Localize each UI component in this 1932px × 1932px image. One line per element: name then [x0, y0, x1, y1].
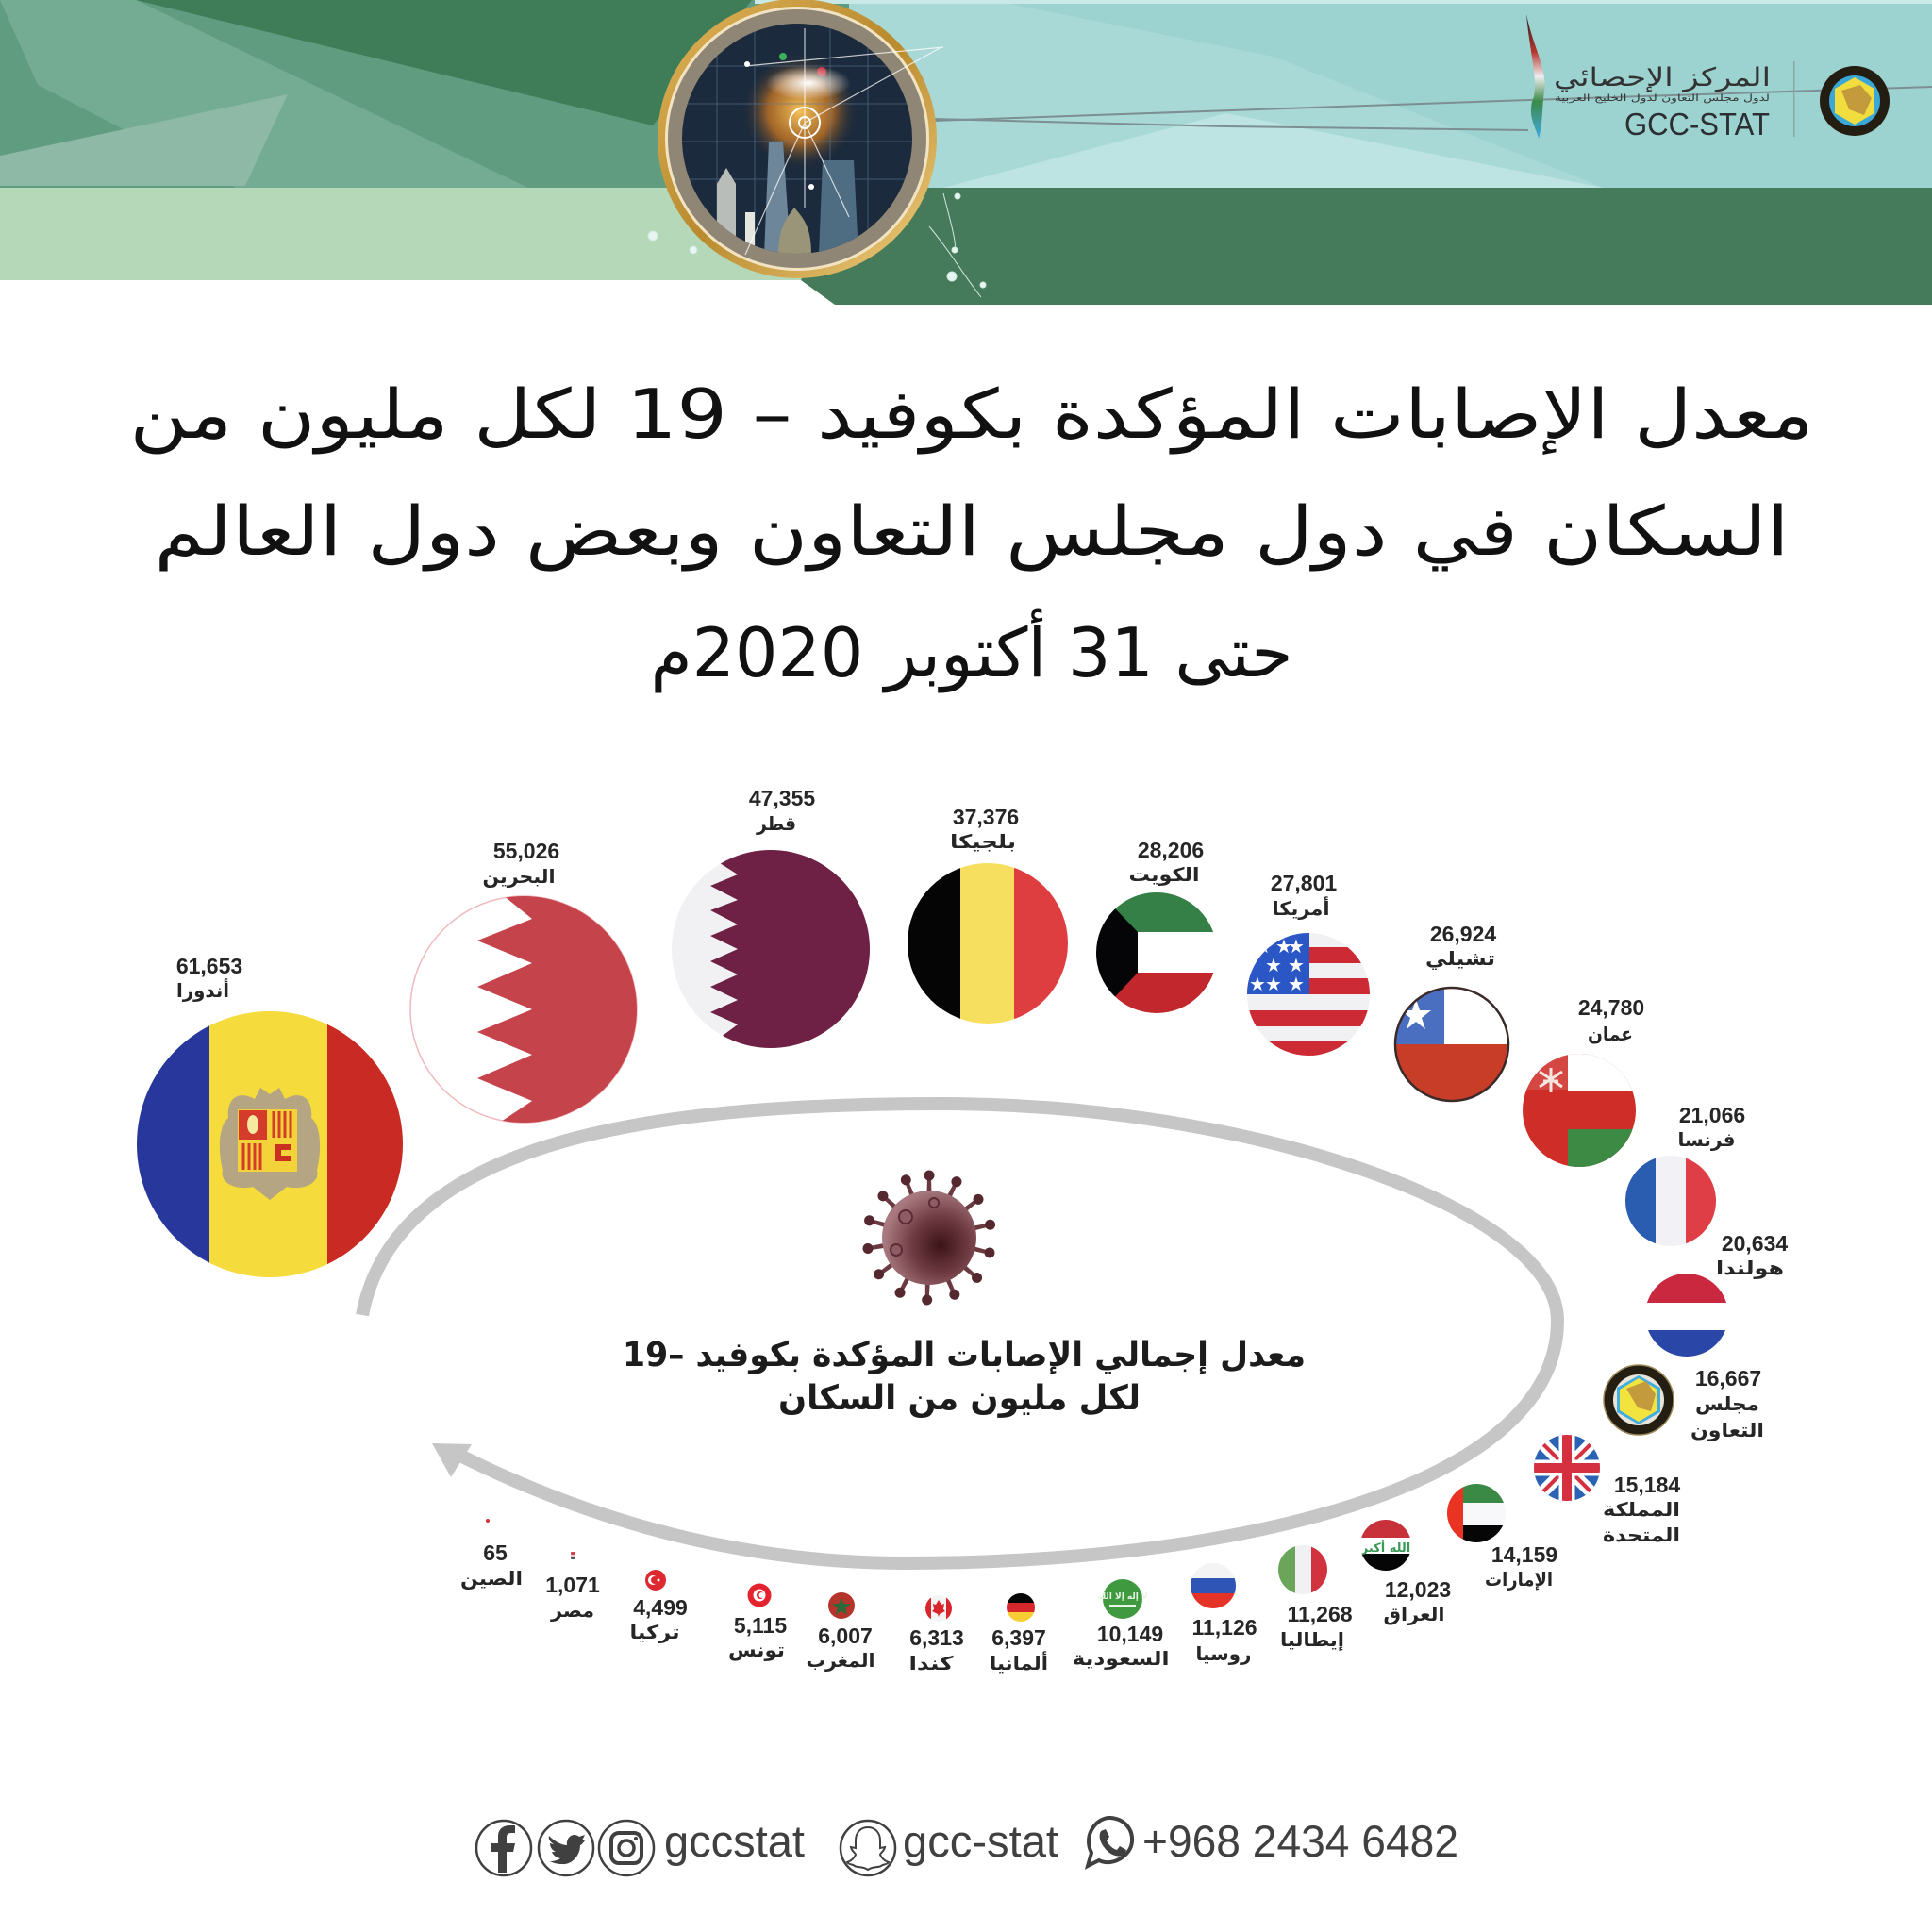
label: USA: أمريكا [1272, 895, 1330, 920]
flag: Kuwait [1096, 892, 1213, 1013]
title: السكان في دول مجلس التعاون وبعض دول العالم [155, 491, 1790, 572]
label: Chile: 26,924 [1430, 922, 1496, 946]
center caption [623, 1336, 1306, 1418]
label: Morocco: 6,007 [818, 1624, 873, 1648]
flag: USA: ★ [1255, 935, 1272, 958]
label: Oman: 24,780 [1578, 995, 1644, 1020]
phone number: +968 2434 6482 [1142, 1816, 1458, 1866]
label: Qatar [749, 786, 815, 835]
handle: gccstat: gccstat [664, 1816, 805, 1866]
label: Iraq [1383, 1577, 1451, 1625]
label: Turkey [630, 1595, 688, 1643]
label: USA: 27,801 [1271, 871, 1337, 895]
label: Iraq: 12,023 [1385, 1577, 1451, 1602]
flag: Russia [1191, 1563, 1236, 1608]
label: Qatar: قطر [756, 812, 796, 835]
flag: USA [1245, 932, 1373, 1057]
label: France: 21,066 [1679, 1103, 1745, 1127]
logo subtitle: لدول مجلس التعاون لدول الخليج العربية [1555, 93, 1770, 104]
label: Andorra [176, 954, 242, 1002]
label: Belgium [950, 805, 1019, 853]
label: Kuwait: الكويت [1128, 863, 1200, 886]
flag: Morocco [828, 1592, 855, 1619]
label: Morocco: المغرب [806, 1649, 875, 1672]
label: Qatar: 47,355 [749, 786, 815, 810]
virus icon [862, 1170, 996, 1306]
label: Kuwait [1128, 838, 1204, 886]
label: Oman: عمان [1588, 1023, 1633, 1045]
label: Tunisia: تونس [728, 1639, 785, 1661]
label: Iraq: العراق [1383, 1603, 1445, 1625]
label: Italy: إيطاليا [1280, 1628, 1344, 1651]
label: Kuwait: 28,206 [1138, 838, 1204, 862]
header banner [0, 0, 1932, 305]
curved arrow [362, 1104, 1557, 1563]
flag: Germany [1007, 1593, 1035, 1622]
label: Chile [1425, 922, 1496, 971]
icon: WhatsApp [1088, 1818, 1132, 1866]
flag: Tunisia [747, 1583, 772, 1607]
label: China: الصين [460, 1567, 523, 1590]
title [129, 375, 1813, 693]
flag: USA: ★ [1288, 935, 1305, 958]
center caption: لكل مليون من السكان [778, 1379, 1141, 1418]
flag: Canada [925, 1595, 952, 1622]
label: Oman [1578, 995, 1644, 1045]
medallion city skyline [717, 142, 858, 259]
label: Saudi Arabia: 10,149 [1097, 1622, 1163, 1646]
label: China: 65 [483, 1541, 508, 1565]
flag: UAE [1447, 1484, 1504, 1542]
label: Bahrain: البحرين [483, 865, 555, 888]
label: GCC [1690, 1366, 1764, 1441]
label: Italy: 11,268 [1287, 1602, 1353, 1626]
flag: Bahrain [409, 895, 638, 1124]
flag: USA: ★ [1265, 973, 1282, 995]
label: Netherlands [1716, 1231, 1788, 1279]
label: Germany: 6,397 [991, 1625, 1046, 1650]
medallion sparkle and crosshair [744, 28, 943, 255]
flag: Turkey [645, 1570, 666, 1591]
label: Russia: روسيا [1196, 1642, 1251, 1665]
label: Bahrain: 55,026 [493, 839, 559, 863]
title: حتى 31 أكتوبر 2020م [650, 608, 1292, 693]
flag: Andorra [137, 1011, 403, 1277]
logo ribbon [1526, 14, 1545, 139]
label: Canada: كندا [909, 1652, 954, 1674]
flag: Italy [1277, 1544, 1329, 1595]
label: GCC: 16,667 [1695, 1366, 1761, 1391]
label: United Kingdom: 15,184 [1614, 1473, 1680, 1497]
label: Saudi Arabia [1072, 1622, 1170, 1670]
flag: USA: ★ [1288, 973, 1305, 995]
flag: Saudi Arabia [1097, 1579, 1148, 1619]
logo GCC emblem [1820, 66, 1890, 136]
flag: Qatar [672, 849, 877, 1052]
label: Egypt [545, 1573, 600, 1622]
label: Bahrain [483, 839, 559, 888]
center caption: معدل إجمالي الإصابات المؤكدة بكوفيد –19 [623, 1336, 1306, 1374]
flag: USA: ★ [1249, 973, 1266, 995]
Andorra coat of arms [220, 1088, 320, 1200]
label: UAE: الإمارات [1485, 1568, 1553, 1591]
label: UAE [1485, 1542, 1557, 1591]
label: Turkey: 4,499 [633, 1595, 688, 1620]
flag: France [1624, 1155, 1719, 1247]
label: Russia [1191, 1615, 1257, 1665]
label: Morocco [806, 1624, 875, 1672]
label: GCC: التعاون [1690, 1419, 1764, 1441]
label: Germany: ألمانيا [990, 1650, 1048, 1674]
label: Saudi Arabia: السعودية [1072, 1647, 1170, 1670]
footer contacts [476, 1816, 1458, 1875]
label: Italy [1280, 1602, 1353, 1651]
label: United Kingdom: المملكة [1603, 1498, 1680, 1521]
logo Arabic name: المركز الإحصائي [1554, 63, 1771, 92]
label: Andorra: 61,653 [176, 954, 242, 978]
flag: Egypt [571, 1552, 575, 1559]
flag: GCC emblem [1604, 1365, 1674, 1435]
logo GCC-STAT wordmark: GCC-STAT [1624, 107, 1770, 142]
flag: USA: ★ [1288, 954, 1305, 976]
label: Chile: تشيلي [1425, 947, 1495, 971]
label: UAE: 14,159 [1491, 1542, 1557, 1567]
medallion emblem [658, 0, 943, 278]
label: Canada: 6,313 [909, 1625, 964, 1650]
label: Turkey: تركيا [630, 1621, 679, 1643]
flag: Netherlands [1645, 1274, 1728, 1357]
label: France [1677, 1103, 1745, 1151]
label: Russia: 11,126 [1191, 1615, 1257, 1640]
label: United Kingdom: المتحدة [1603, 1524, 1680, 1546]
label: Tunisia: 5,115 [734, 1613, 787, 1638]
label: France: فرنسا [1677, 1128, 1736, 1151]
icon: Facebook [476, 1821, 531, 1875]
flag: China [486, 1519, 490, 1523]
label: Andorra: أندورا [176, 977, 229, 1002]
flag: Chile [1394, 986, 1511, 1104]
label: USA [1271, 871, 1337, 920]
title: معدل الإصابات المؤكدة بكوفيد – 19 لكل مليون من [129, 375, 1813, 455]
label: Egypt: مصر [550, 1599, 594, 1622]
handle: gcc-stat: gcc-stat [903, 1816, 1058, 1866]
label: GCC: مجلس [1695, 1392, 1759, 1415]
flag: USA: ★ [1275, 935, 1292, 958]
flag: United Kingdom [1534, 1435, 1600, 1501]
label: Canada [909, 1625, 964, 1674]
banner network nodes [648, 193, 986, 297]
label: Netherlands: 20,634 [1722, 1231, 1788, 1256]
label: Netherlands: هولندا [1716, 1257, 1784, 1279]
icon: Instagram [599, 1821, 654, 1875]
label: Belgium: بلجيكا [950, 830, 1016, 853]
flag: Saudi Arabia: لا إله إلا الله [1097, 1592, 1148, 1602]
flag: Oman [1521, 1052, 1638, 1169]
flag: USA: ★ [1265, 954, 1282, 976]
label: China [460, 1541, 523, 1590]
label: Germany [990, 1625, 1048, 1674]
label: Belgium: 37,376 [953, 805, 1019, 829]
flag: Iraq [1361, 1520, 1410, 1571]
icon: Snapchat [841, 1821, 895, 1875]
icon: Twitter [539, 1821, 593, 1875]
label: Egypt: 1,071 [545, 1573, 600, 1597]
GCC-STAT logo [1526, 14, 1890, 142]
label: Tunisia [728, 1613, 787, 1661]
banner light rays [934, 87, 1932, 130]
flag: Belgium [906, 862, 1071, 1024]
label: United Kingdom [1603, 1473, 1680, 1546]
flag: Iraq: الله أكبر [1360, 1540, 1410, 1556]
